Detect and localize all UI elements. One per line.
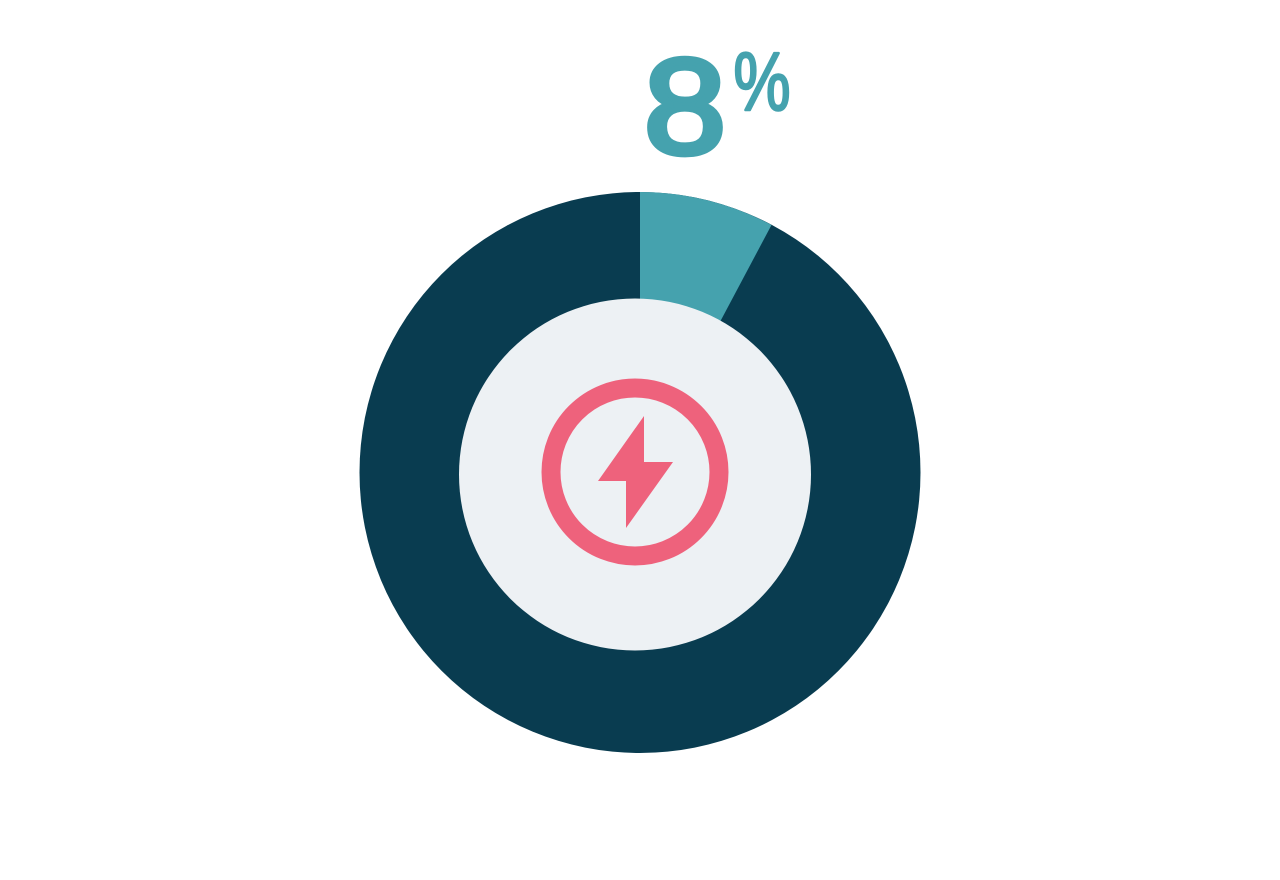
donut remainder segment [360,192,920,753]
percentage label: % [734,35,790,128]
donut inner circle [459,298,811,650]
percentage label [644,31,790,182]
donut highlighted segment: 8% [640,192,772,472]
percentage label: 8 [644,31,726,182]
icon: lightning bolt in ring [551,388,719,556]
donut chart [360,192,920,753]
